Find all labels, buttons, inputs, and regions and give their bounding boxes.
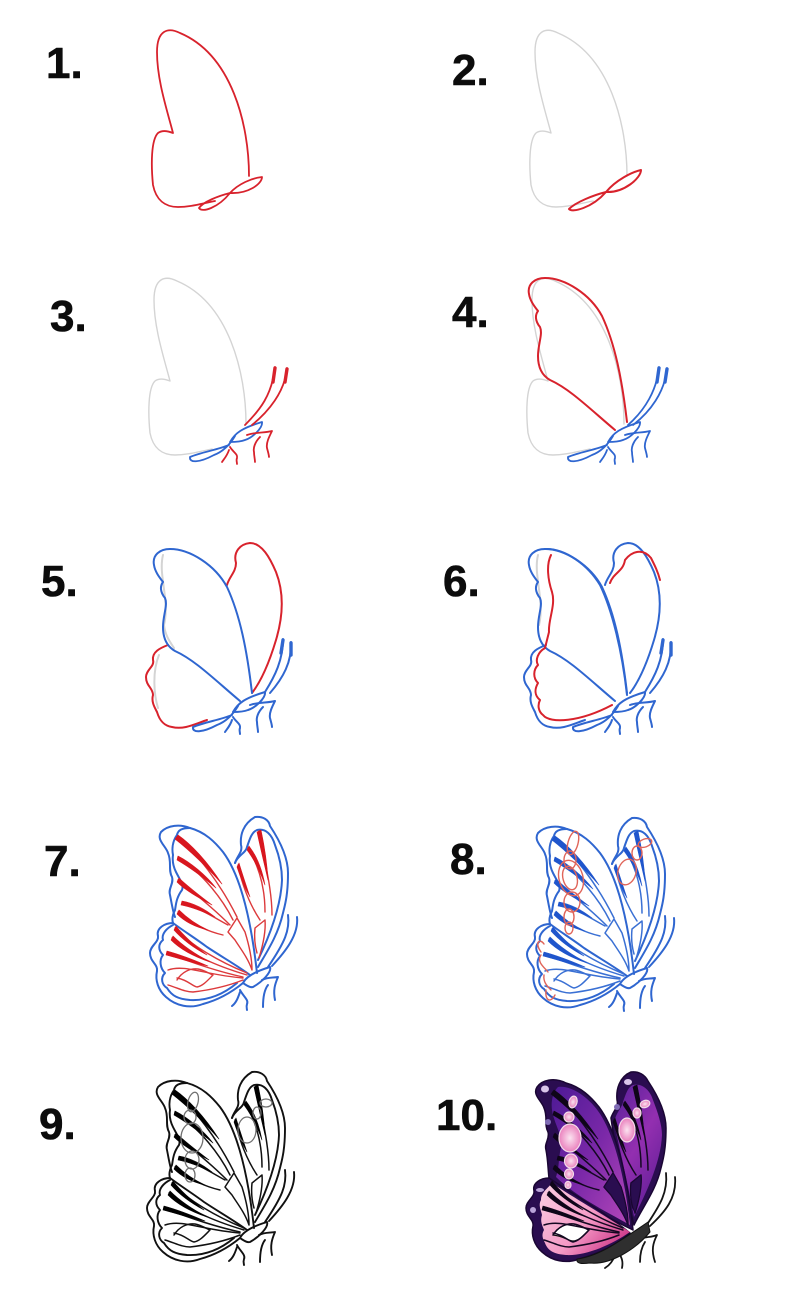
forewing bbox=[536, 1080, 633, 1230]
step number 9: 9. bbox=[39, 1100, 76, 1149]
black veins bbox=[543, 1086, 648, 1247]
step number 8: 8. bbox=[450, 835, 487, 884]
step number 4: 4. bbox=[452, 288, 489, 337]
step number 2: 2. bbox=[452, 46, 489, 95]
step 7 drawing: red wing veins bbox=[150, 817, 297, 1010]
step number 6: 6. bbox=[443, 557, 480, 606]
right wing bbox=[611, 1072, 666, 1225]
faint oval spots bbox=[181, 1091, 272, 1182]
step 4 drawing: forewing contour bbox=[527, 278, 667, 464]
step number 10: 10. bbox=[436, 1091, 497, 1140]
step 9 drawing: black ink outline bbox=[147, 1072, 294, 1265]
hindwing bbox=[526, 1178, 630, 1261]
antennae and legs bbox=[605, 1173, 675, 1268]
step number 7: 7. bbox=[44, 837, 81, 886]
step 5 drawing: scalloped wing edges bbox=[146, 543, 291, 734]
step 6 drawing: inner wing contours bbox=[524, 543, 671, 734]
dark purple arrow marks bbox=[604, 1173, 628, 1225]
step 1 drawing: wing and body outline bbox=[152, 30, 262, 210]
step number 5: 5. bbox=[41, 557, 78, 606]
pink wing spots bbox=[530, 1079, 651, 1213]
step 8 drawing: blue veins with red oval spots bbox=[527, 818, 674, 1011]
white eye on hindwing bbox=[553, 1224, 589, 1241]
step 2 drawing: body refined bbox=[530, 30, 641, 210]
dark body bbox=[577, 1222, 650, 1264]
step number 1: 1. bbox=[46, 39, 83, 88]
step number 3: 3. bbox=[50, 292, 87, 341]
step 10 drawing: coloured butterfly bbox=[526, 1072, 675, 1268]
red oval spots bbox=[538, 830, 653, 1000]
step 3 drawing: body, legs and antennae bbox=[149, 278, 287, 464]
